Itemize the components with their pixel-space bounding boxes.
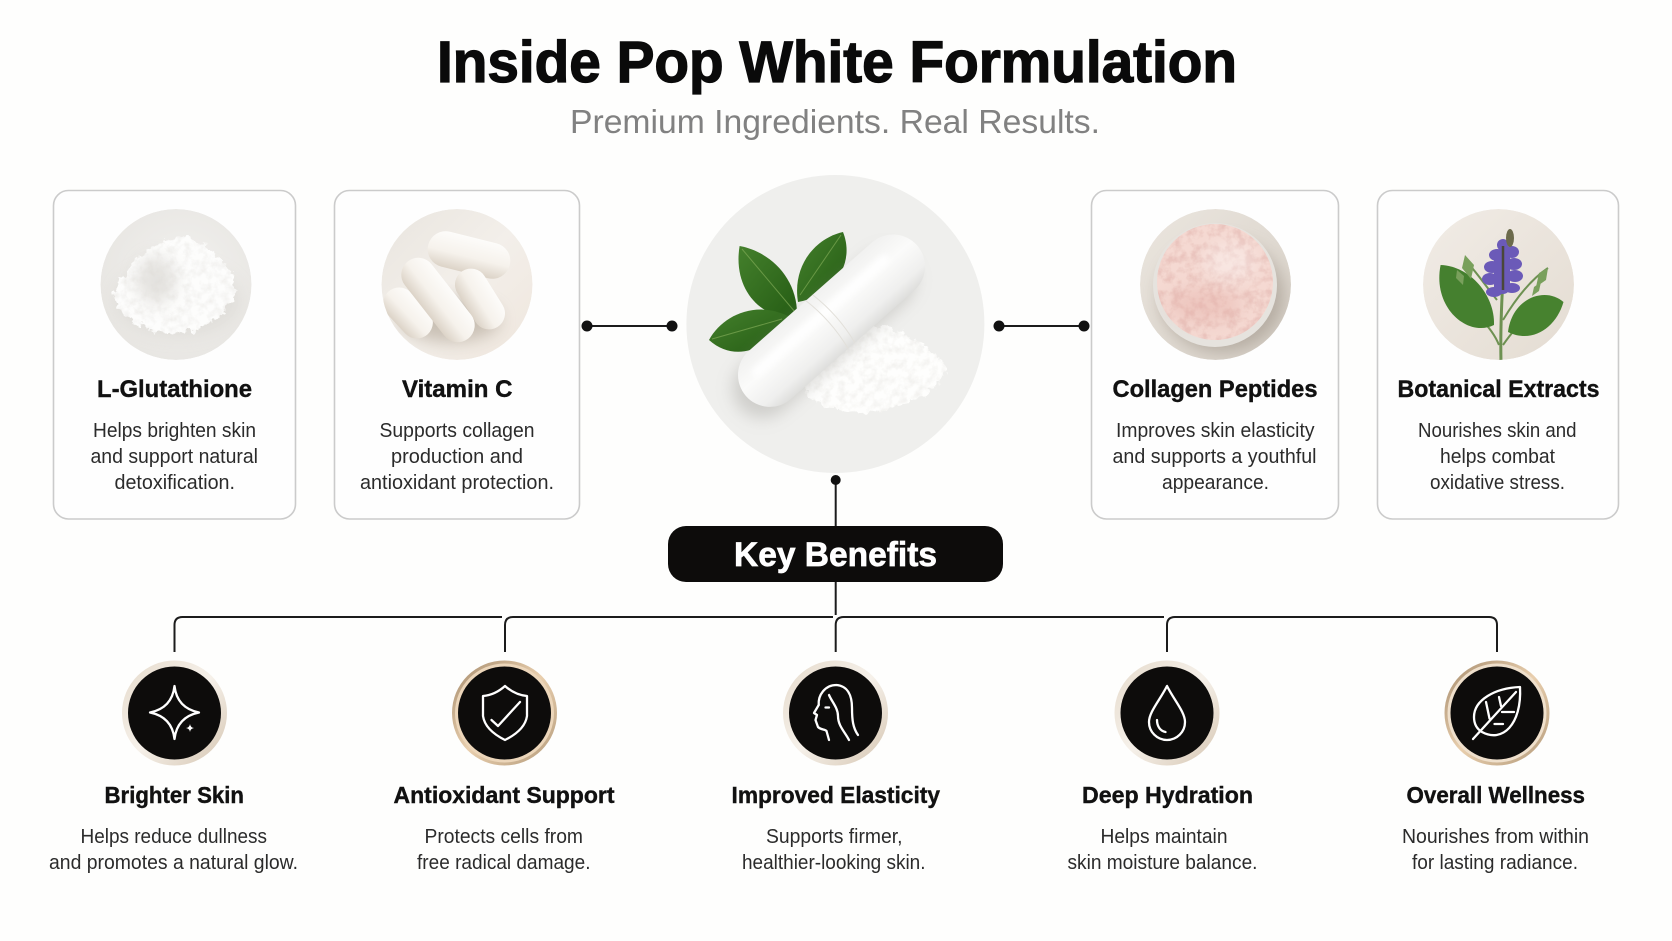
benefit: Deep Hydration: [1068, 660, 1258, 874]
capsule shadow: [720, 237, 928, 431]
panel: Collagen Peptides: [1092, 190, 1338, 519]
benefit: Brighter Skin: [49, 660, 298, 874]
description: [1402, 825, 1589, 874]
subtitle: Premium Ingredients. Real Results.: [570, 104, 1100, 141]
name: Improved Elasticity: [732, 782, 940, 808]
description: production and: [391, 445, 523, 468]
powder pile: [804, 327, 948, 412]
description: [1068, 825, 1258, 874]
capsule: [725, 221, 938, 420]
description: [49, 825, 298, 874]
connector: right: [994, 320, 1090, 332]
heading pill: Key Benefits: Key Benefits: [734, 536, 937, 574]
connector: center to key benefits: [831, 475, 841, 527]
heading pill: Key Benefits: [668, 526, 1003, 582]
description: Improves skin elasticity: [1116, 419, 1315, 442]
name: Collagen Peptides: [1112, 376, 1318, 403]
image: pink powder bowl: [1140, 209, 1291, 360]
benefit: Improved Elasticity: [732, 660, 940, 874]
description: skin moisture balance.: [1068, 851, 1258, 874]
description: appearance.: [1162, 471, 1269, 494]
description: helps combat: [1440, 445, 1555, 468]
description: detoxification.: [114, 471, 235, 494]
description: healthier-looking skin.: [742, 851, 926, 874]
description: oxidative stress.: [1430, 471, 1565, 494]
panel: L-Glutathione: [54, 190, 296, 519]
name: Overall Wellness: [1406, 782, 1585, 808]
description: Helps maintain: [1100, 825, 1228, 848]
name: L-Glutathione: [97, 376, 252, 403]
description: [360, 419, 554, 494]
name: Brighter Skin: [104, 782, 244, 808]
panel: Botanical Extracts: [1378, 190, 1618, 519]
benefit: Overall Wellness: [1402, 660, 1589, 874]
description: Helps brighten skin: [93, 419, 256, 442]
title: Inside Pop White Formulation: [437, 30, 1237, 95]
icon: sparkle: [122, 660, 227, 766]
leaves: [709, 232, 847, 352]
central image: capsule with leaves and powder: [686, 175, 984, 473]
description: and promotes a natural glow.: [49, 851, 298, 874]
connector: left: [582, 320, 678, 332]
image: white powder: [100, 209, 252, 360]
description: Nourishes from within: [1402, 825, 1589, 848]
icon: leaf: [1444, 660, 1550, 766]
description: [1418, 419, 1576, 494]
icon: shield: [452, 660, 557, 766]
name: Antioxidant Support: [394, 782, 615, 808]
description: [417, 825, 590, 874]
description: and support natural: [90, 445, 258, 468]
benefit: Antioxidant Support: [394, 660, 615, 874]
image: capsules: [377, 209, 532, 360]
icon: water drop: [1114, 660, 1220, 766]
description: antioxidant protection.: [360, 471, 554, 494]
description: Helps reduce dullness: [80, 825, 267, 848]
description: and supports a youthful: [1112, 445, 1316, 468]
image: botanical sprig: [1423, 209, 1574, 362]
name: Botanical Extracts: [1398, 376, 1600, 403]
description: [1112, 419, 1316, 494]
description: [742, 825, 926, 874]
name: Deep Hydration: [1082, 782, 1253, 808]
description: Nourishes skin and: [1418, 419, 1576, 442]
connector tree to benefits: [174, 582, 1497, 652]
icon: face profile: [783, 660, 888, 766]
description: Protects cells from: [424, 825, 583, 848]
panel: Vitamin C: [334, 190, 580, 519]
description: for lasting radiance.: [1412, 851, 1578, 874]
description: Supports collagen: [380, 419, 534, 442]
description: Supports firmer,: [766, 825, 902, 848]
name: Vitamin C: [402, 376, 513, 403]
description: free radical damage.: [417, 851, 590, 874]
description: [90, 419, 258, 494]
